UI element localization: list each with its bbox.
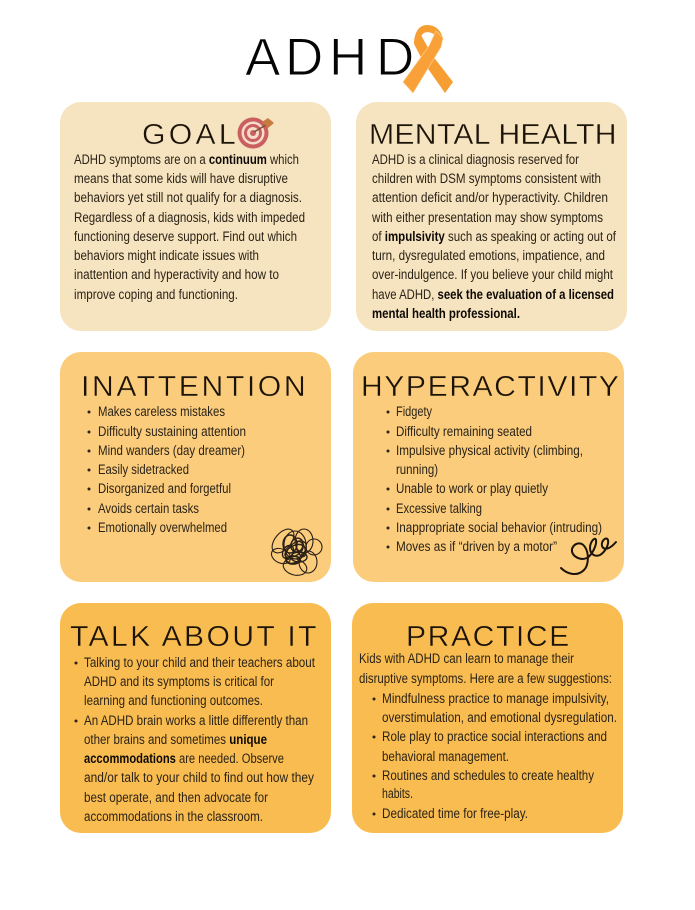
list: inattention symptoms: Easily sidetracked bbox=[98, 462, 189, 477]
text block: practice: Dedicated time for free-play. bbox=[382, 806, 528, 821]
list: inattention symptoms: Mind wanders (day dreamer) bbox=[98, 443, 245, 458]
text block: talk about it: best operate, and then advocate for bbox=[84, 790, 268, 805]
panel: goal bbox=[60, 102, 331, 331]
text block: talk about it: accommodations are needed. Observe bbox=[84, 751, 284, 766]
text block: goal: behaviors yet still not qualify for a diagnosis. bbox=[74, 190, 302, 205]
list: hyperactivity symptoms: Difficulty remaining seated bbox=[396, 424, 532, 439]
list: hyperactivity symptoms bbox=[386, 404, 602, 554]
heading: goal: GOAL bbox=[142, 119, 236, 151]
text block: practice: disruptive symptoms. Here are a few suggestions: bbox=[359, 671, 612, 686]
panel: talk about it bbox=[60, 603, 331, 833]
text block: talk about it: learning and functioning outcomes. bbox=[84, 693, 263, 708]
list: hyperactivity symptoms: Inappropriate social behavior (intruding) bbox=[396, 520, 602, 535]
text block: goal: inattention and hyperactivity and how to bbox=[74, 267, 279, 282]
panel: inattention bbox=[60, 352, 331, 582]
icon: tangled scribble bbox=[268, 525, 322, 578]
text block: talk about it: other brains and sometimes unique bbox=[84, 732, 267, 747]
heading: inattention: INATTENTION bbox=[81, 371, 306, 403]
text block: mental health: have ADHD, seek the evaluation of a licensed bbox=[372, 287, 614, 302]
text block: practice: overstimulation, and emotional dysregulation. bbox=[382, 710, 617, 725]
text block: talk about it: accommodations in the classroom. bbox=[84, 809, 263, 824]
text block: talk about it: and/or talk to your child to find out how they bbox=[84, 770, 314, 785]
icon: curly squiggle bbox=[561, 539, 616, 574]
text block: talk about it: ADHD and its symptoms is critical for bbox=[84, 674, 274, 689]
panel: mental health bbox=[356, 102, 627, 331]
heading: practice: PRACTICE bbox=[406, 621, 569, 653]
icon: awareness ribbon bbox=[403, 25, 453, 93]
heading: mental health: MENTAL HEALTH bbox=[369, 119, 617, 151]
heading: hyperactivity: HYPERACTIVITY bbox=[361, 371, 619, 403]
text block: practice: Kids with ADHD can learn to manage their bbox=[359, 651, 574, 666]
text block: mental health: of impulsivity such as speaking or acting out of bbox=[372, 229, 616, 244]
text block: mental health: ADHD is a clinical diagnosis reserved for bbox=[372, 152, 579, 167]
text block: practice: Mindfulness practice to manage impulsivity, bbox=[382, 691, 609, 706]
list: inattention symptoms: Difficulty sustaining attention bbox=[98, 424, 246, 439]
text block: practice bbox=[359, 651, 617, 821]
text block: talk about it: Talking to your child and their teachers about bbox=[84, 655, 315, 670]
text block: practice: behavioral management. bbox=[382, 749, 509, 764]
text block: mental health: turn, dysregulated emotions, impatience, and bbox=[372, 248, 605, 263]
list: hyperactivity symptoms: Fidgety bbox=[396, 404, 432, 419]
list: inattention symptoms: Makes careless mistakes bbox=[98, 404, 225, 419]
list: inattention symptoms: Emotionally overwhelmed bbox=[98, 520, 227, 535]
list: hyperactivity symptoms: Impulsive physical activity (climbing, bbox=[396, 443, 583, 458]
text block: mental health: children with DSM symptoms consistent with bbox=[372, 171, 601, 186]
text block: goal: Regardless of a diagnosis, kids with impeded bbox=[74, 210, 305, 225]
list: inattention symptoms: Disorganized and forgetful bbox=[98, 481, 231, 496]
text block: mental health: attention deficit and/or hyperactivity. Children bbox=[372, 190, 608, 205]
list: hyperactivity symptoms: Unable to work or play quietly bbox=[396, 481, 548, 496]
text block: mental health: with either presentation may show symptoms bbox=[371, 210, 603, 225]
text block: talk about it: An ADHD brain works a little differently than bbox=[84, 713, 308, 728]
heading: talk about it: TALK ABOUT IT bbox=[70, 621, 316, 653]
text block: goal: means that some kids will have disruptive bbox=[74, 171, 288, 186]
list: inattention symptoms bbox=[88, 404, 246, 535]
text block: practice: habits. bbox=[382, 786, 413, 801]
text block: goal: functioning deserve support. Find out which bbox=[74, 229, 297, 244]
list: hyperactivity symptoms: Excessive talking bbox=[396, 501, 482, 516]
text block: mental health: over-indulgence. If you believe your child might bbox=[372, 267, 613, 282]
icon: target bbox=[238, 118, 274, 148]
list: inattention symptoms: Avoids certain tasks bbox=[98, 501, 199, 516]
text block: practice: Routines and schedules to create healthy bbox=[382, 768, 594, 783]
text block: mental health: mental health professional. bbox=[372, 306, 520, 321]
text block: goal: improve coping and functioning. bbox=[74, 287, 238, 302]
text block: goal bbox=[74, 152, 305, 302]
text block: goal: behaviors might indicate issues with bbox=[74, 248, 259, 263]
panel: practice bbox=[352, 603, 623, 833]
text block: talk about it bbox=[74, 655, 315, 824]
text block: mental health bbox=[371, 152, 616, 321]
list: hyperactivity symptoms: Moves as if “driven by a motor” bbox=[396, 539, 557, 554]
title: ADHD bbox=[245, 28, 414, 87]
list: hyperactivity symptoms: running) bbox=[396, 462, 438, 477]
panel: hyperactivity bbox=[353, 352, 624, 582]
text block: practice: Role play to practice social interactions and bbox=[382, 729, 607, 744]
text block: goal: ADHD symptoms are on a continuum which bbox=[74, 152, 299, 167]
